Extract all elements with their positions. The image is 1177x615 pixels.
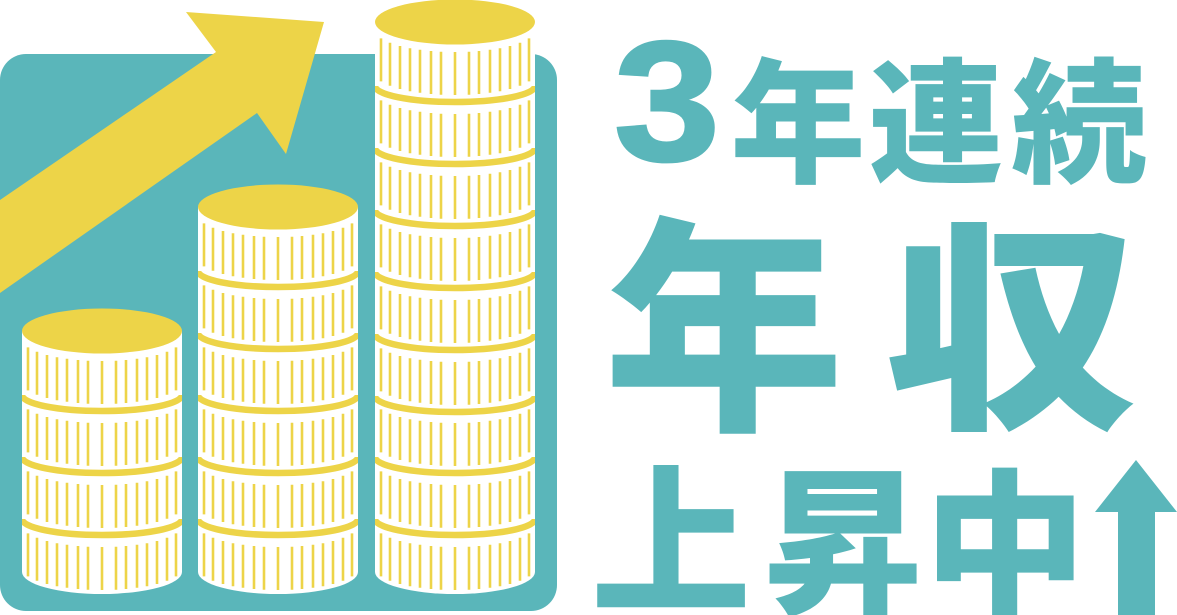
heading: 年収: 収 xyxy=(885,210,1137,459)
heading: 3年連続: 年 xyxy=(730,50,866,201)
icon: up arrow xyxy=(1095,460,1177,615)
heading: 3年連続: 続 xyxy=(1012,50,1146,201)
heading: 3年連続: 3 xyxy=(614,7,720,197)
heading: 上昇中 xyxy=(591,455,1087,615)
coin stack: tall xyxy=(375,0,535,594)
heading: 3年連続 xyxy=(614,7,1146,201)
heading: 年収 xyxy=(604,204,1137,461)
panel: teal background xyxy=(0,54,557,611)
heading: 3年連続: 連 xyxy=(868,50,1004,201)
coin stack: short xyxy=(22,308,182,594)
arrow: yellow rising arrow xyxy=(0,12,324,293)
coin stack: medium xyxy=(198,184,358,594)
heading: 年収: 年 xyxy=(604,204,844,461)
